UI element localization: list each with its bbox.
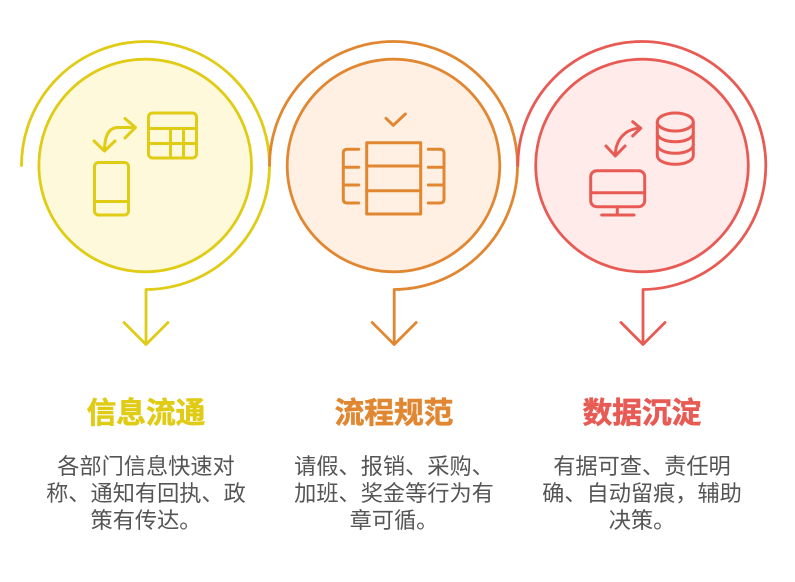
text: 数据沉淀 description: 有据可查、责任明确、自动留痕，辅助决策。 (542, 454, 742, 533)
icon: phone syncing with table (94, 113, 196, 215)
step 2: orange circle group (270, 42, 517, 344)
icon: checked process table (343, 114, 444, 214)
heading: 数据沉淀: 数据沉淀 (583, 397, 701, 430)
inner circle: yellow (39, 59, 252, 272)
heading: 信息流通: 信息流通 (87, 397, 205, 430)
outer arc with down arrow: yellow (22, 42, 269, 345)
icon: monitor syncing with database (591, 113, 693, 215)
text: 信息流通 description: 各部门信息快速对称、通知有回执、政策有传达。 (46, 454, 246, 533)
outer arc with down arrow: red (518, 42, 766, 345)
text: 流程规范 description: 请假、报销、采购、加班、奖金等行为有章可循。 (294, 454, 494, 533)
inner circle: orange (287, 59, 500, 272)
outer arc with down arrow: orange (270, 42, 517, 344)
heading: 流程规范: 流程规范 (335, 397, 453, 430)
step 1: yellow circle group (22, 42, 269, 345)
step 3: red circle group (518, 42, 766, 345)
inner circle: red (536, 59, 748, 272)
